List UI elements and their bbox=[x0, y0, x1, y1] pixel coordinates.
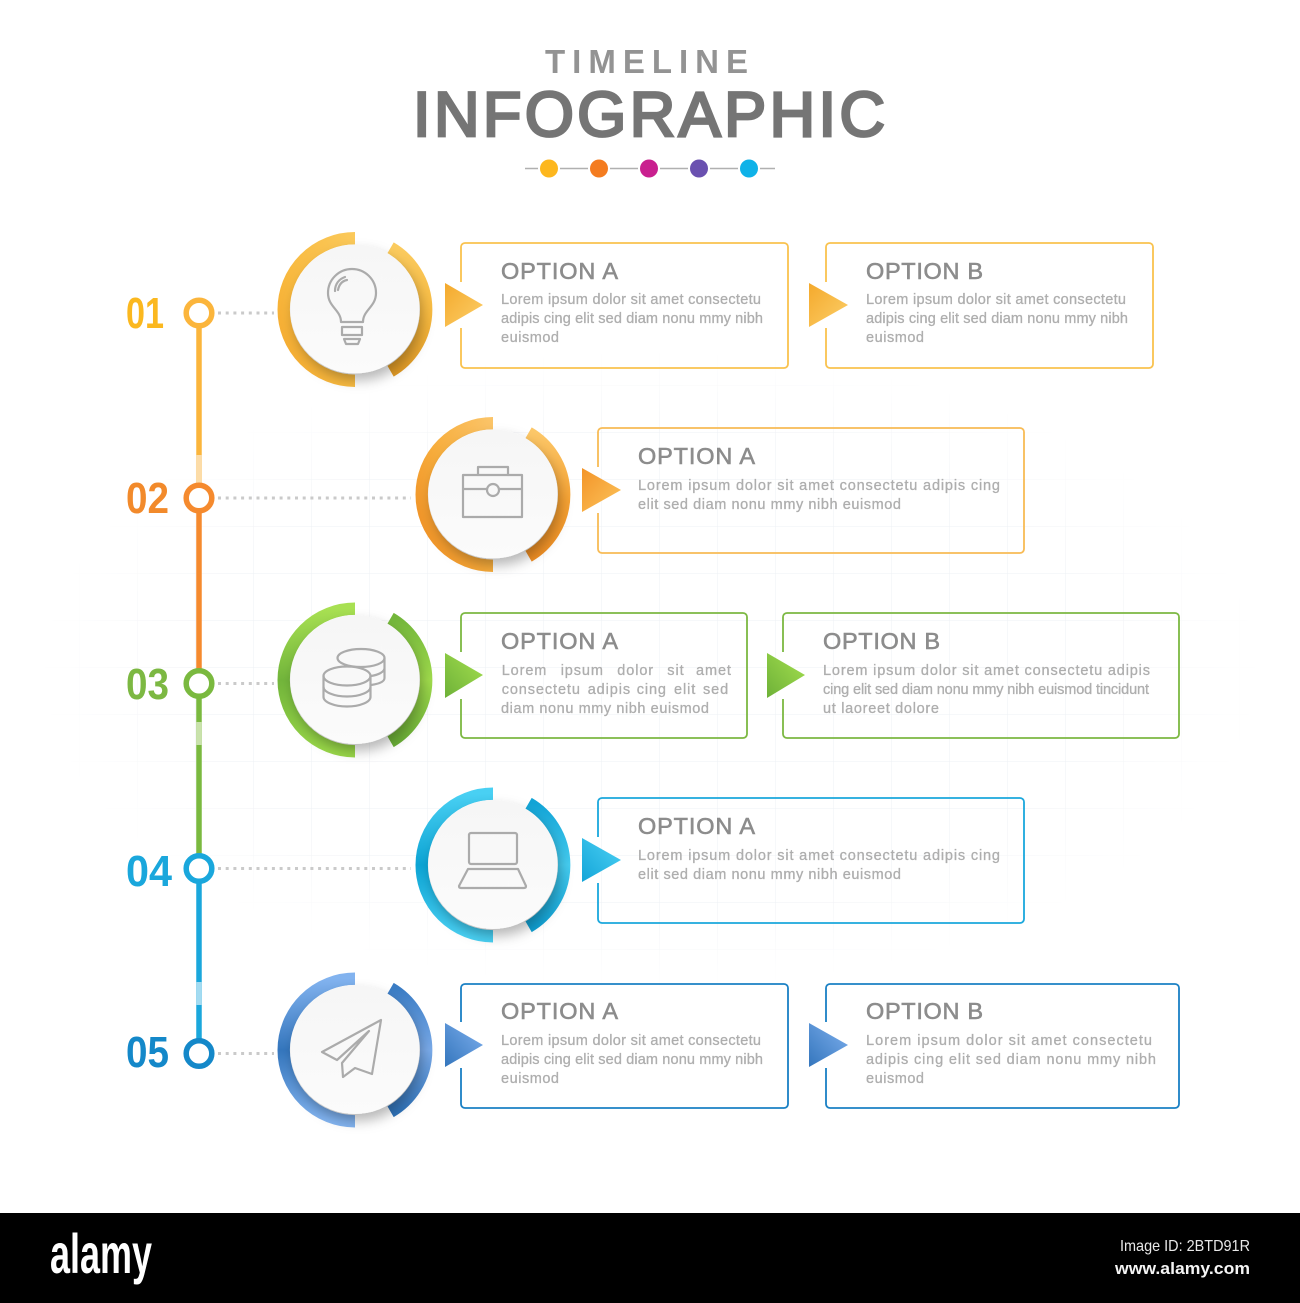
row 3 option B: OPTION B bbox=[823, 628, 940, 654]
ring 2 with briefcase bbox=[422, 423, 564, 566]
icon: lightbulb bbox=[328, 269, 376, 344]
ring 3 with coins bbox=[284, 609, 426, 751]
row 5 option B: euismod bbox=[866, 1071, 924, 1087]
row 1 option A: OPTION A bbox=[501, 258, 618, 284]
step 04 marker bbox=[126, 847, 411, 896]
row 5 option A: OPTION A bbox=[501, 998, 618, 1024]
step 03 marker bbox=[126, 660, 274, 709]
icon: paper plane bbox=[322, 1020, 381, 1077]
step 02 marker: 02 bbox=[126, 474, 169, 523]
row 3 option A bbox=[445, 613, 747, 738]
row 4 option A: OPTION A bbox=[638, 813, 755, 839]
row 1 option B: OPTION B bbox=[866, 258, 983, 284]
timeline vertical line bbox=[196, 326, 202, 1041]
row 3 option A: Lorem bbox=[502, 663, 547, 679]
footer bar bbox=[0, 1213, 1300, 1303]
row 2 option A: elit sed diam nonu mmy nibh euismod bbox=[638, 497, 901, 513]
row 1 option A: euismod bbox=[501, 330, 559, 346]
row 5 option B: Lorem ipsum dolor sit amet consectetu bbox=[866, 1033, 1152, 1049]
row 3 option B: cing elit sed diam nonu mmy nibh euismod tincidunt bbox=[823, 682, 1149, 698]
row 4 option A: elit sed diam nonu mmy nibh euismod bbox=[638, 867, 901, 883]
row 3 option B: ut laoreet dolore bbox=[823, 701, 939, 717]
footer logo: alamy bbox=[50, 1222, 152, 1285]
row 3 option B bbox=[767, 613, 1179, 738]
row 5 option B bbox=[809, 984, 1179, 1108]
row 5 option B: adipis cing elit sed diam nonu mmy nibh bbox=[866, 1052, 1156, 1068]
icon: coins bbox=[324, 649, 384, 706]
row 5 option A: euismod bbox=[501, 1071, 559, 1087]
row 3 option A: dolor bbox=[617, 663, 654, 679]
row 1 option A bbox=[445, 243, 788, 368]
row 1 option A: adipis cing elit sed diam nonu mmy nibh bbox=[501, 311, 763, 327]
row 3 option B: Lorem ipsum dolor sit amet consectetu adipis bbox=[823, 663, 1150, 679]
row 2 option A: Lorem ipsum dolor sit amet consectetu adipis cing bbox=[638, 478, 1000, 494]
row 3 option A: OPTION A bbox=[501, 628, 618, 654]
row 3 option A: elit bbox=[674, 682, 696, 698]
row 5 option A: adipis cing elit sed diam nonu mmy nibh bbox=[501, 1052, 763, 1068]
step 04 marker: 04 bbox=[126, 847, 172, 896]
step 02 marker bbox=[126, 474, 411, 523]
row 4 option A: Lorem ipsum dolor sit amet consectetu adipis cing bbox=[638, 848, 1000, 864]
step 03 marker: 03 bbox=[126, 660, 169, 709]
row 3 option A: cing bbox=[637, 682, 667, 698]
row 1 option A: Lorem ipsum dolor sit amet consectetu bbox=[501, 292, 761, 308]
row 3 option A: ipsum bbox=[561, 663, 604, 679]
icon: laptop bbox=[459, 833, 526, 888]
title bbox=[413, 43, 885, 150]
row 3 option A: amet bbox=[696, 663, 732, 679]
row 3 option A: consectetu bbox=[502, 682, 581, 698]
row 2 option A bbox=[582, 428, 1024, 553]
heading: infographic: INFOGRAPHIC bbox=[413, 80, 885, 150]
step 01 marker: 01 bbox=[126, 289, 164, 338]
row 3 option A: sit bbox=[667, 663, 685, 679]
ring 1 with lightbulb bbox=[284, 238, 426, 381]
step 05 marker: 05 bbox=[126, 1028, 169, 1077]
ring 5 with paper plane bbox=[284, 979, 426, 1121]
row 1 option B: Lorem ipsum dolor sit amet consectetu bbox=[866, 292, 1126, 308]
row 4 option A bbox=[582, 798, 1024, 923]
row 5 option A bbox=[445, 984, 788, 1108]
step 01 marker bbox=[126, 289, 274, 338]
row 2 option A: OPTION A bbox=[638, 443, 755, 469]
row 3 option A: sed bbox=[703, 682, 729, 698]
row 5 option A: Lorem ipsum dolor sit amet consectetu bbox=[501, 1033, 761, 1049]
step 05 marker bbox=[126, 1028, 274, 1077]
row 1 option B: euismod bbox=[866, 330, 924, 346]
row 5 option B: OPTION B bbox=[866, 998, 983, 1024]
image id: Image ID: 2BTD91R bbox=[1120, 1238, 1250, 1255]
title dot divider bbox=[525, 158, 775, 180]
row 3 option A: adipis bbox=[588, 682, 631, 698]
row 1 option B: adipis cing elit sed diam nonu mmy nibh bbox=[866, 311, 1128, 327]
icon: briefcase bbox=[463, 467, 522, 517]
heading: timeline: TIMELINE bbox=[545, 43, 748, 80]
row 3 option A: diam nonu mmy nibh euismod bbox=[501, 701, 709, 717]
ring 4 with laptop bbox=[422, 794, 564, 936]
website: www.alamy.com bbox=[1114, 1259, 1250, 1278]
row 1 option B bbox=[809, 243, 1153, 368]
